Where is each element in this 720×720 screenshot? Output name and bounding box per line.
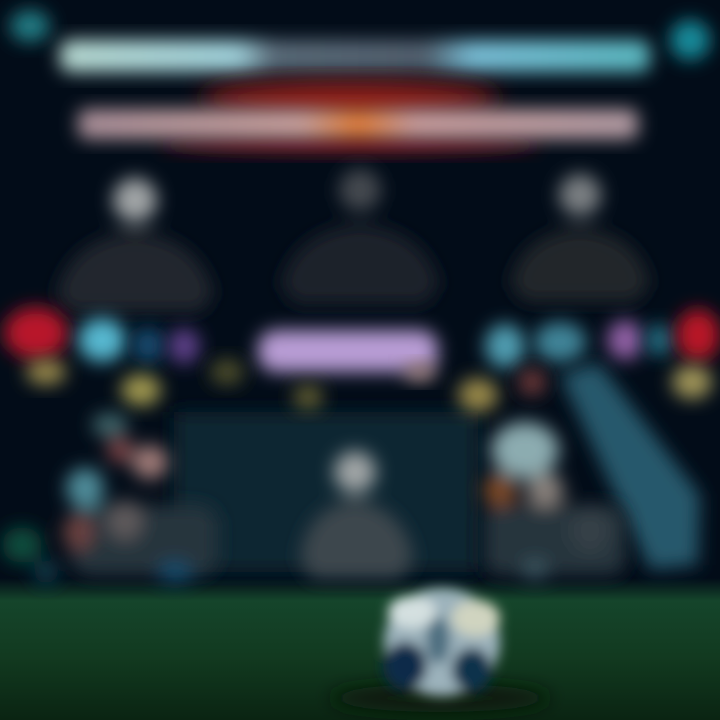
subtitle banner [78, 82, 638, 154]
player: top centre [280, 169, 440, 304]
player: panel centre [300, 451, 414, 578]
player: top right [510, 174, 650, 302]
central panel [174, 412, 478, 572]
pitch [0, 578, 720, 720]
diagonal ribbon [560, 362, 700, 570]
icon row left [4, 307, 244, 406]
player group: right [483, 422, 626, 580]
football [383, 588, 500, 696]
icon row right [458, 309, 720, 412]
centre pill banner [258, 330, 438, 410]
player group: left [2, 413, 218, 584]
player: top left [56, 178, 214, 312]
title banner [10, 10, 710, 72]
